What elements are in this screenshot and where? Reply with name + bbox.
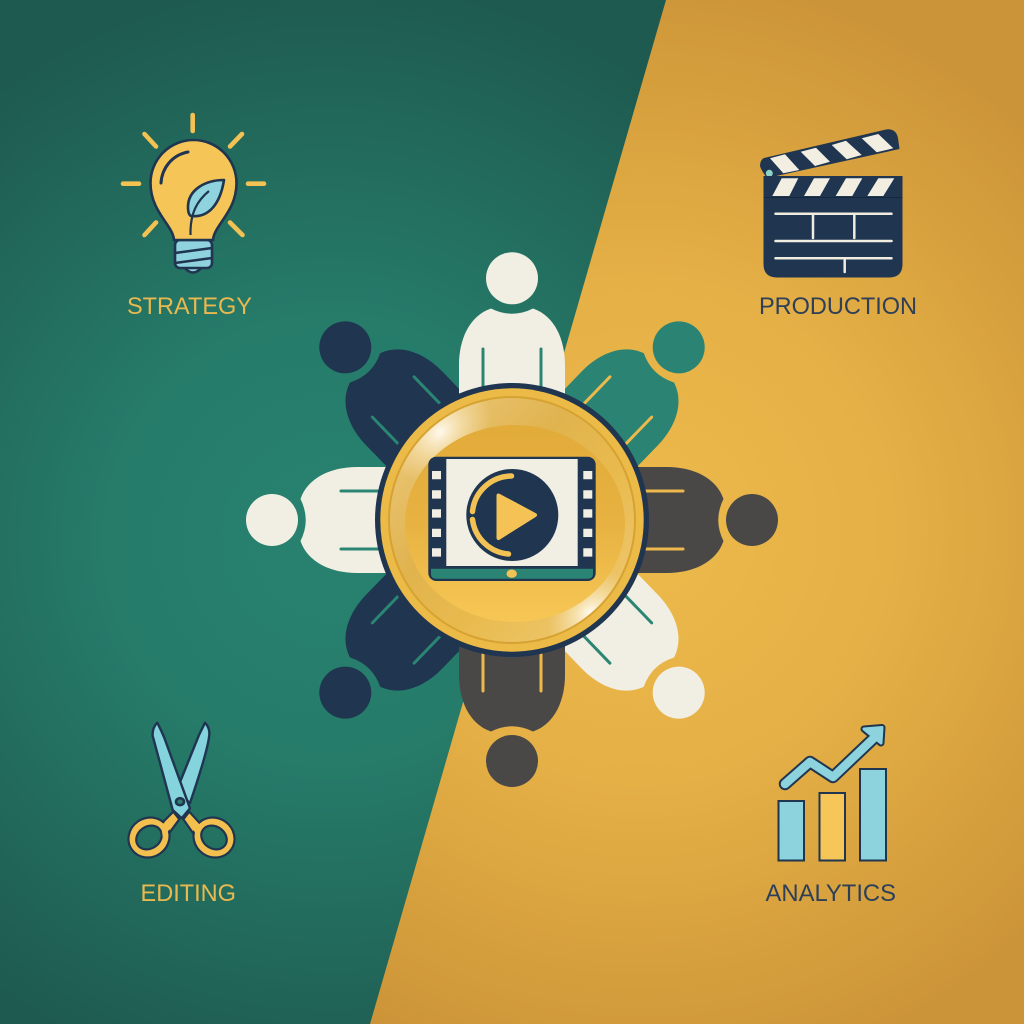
icon: production clapperboard [760,129,902,278]
label: analytics: ANALYTICS [766,880,896,907]
person: upper left navy [289,292,495,499]
panel: gold background [370,0,1024,1024]
person: upper right teal [529,292,735,499]
icon: strategy light bulb [123,115,264,272]
person: lower left navy [289,541,495,748]
icon: film strip video player [428,457,596,581]
panel: green background [0,0,666,1024]
person: left cream [246,467,432,573]
person: bottom dark grey [459,600,565,787]
central gold medallion [375,383,649,657]
chart: analytics bars and trend arrow [778,728,886,860]
icon: editing scissors [121,723,242,866]
person: lower right cream [529,541,735,748]
label: strategy: STRATEGY [127,293,252,320]
label: editing: EDITING [140,880,236,907]
label: production: PRODUCTION [759,293,917,320]
person: top cream [459,252,565,440]
person: right dark grey [592,467,778,573]
